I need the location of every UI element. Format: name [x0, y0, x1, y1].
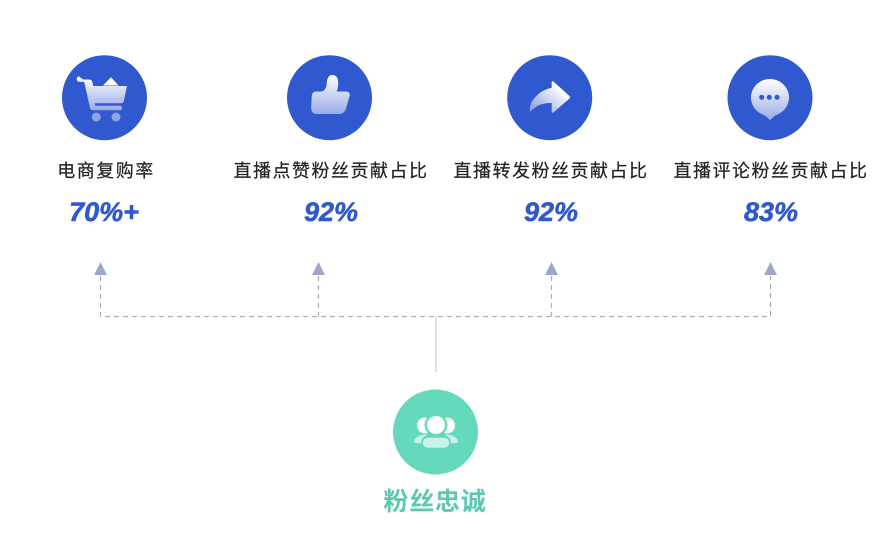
arrow: up 1	[94, 262, 107, 275]
value: 83%: 83%	[744, 197, 798, 227]
label: live like share: 直播点赞粉丝贡献占比	[234, 161, 428, 181]
icon: shopping cart	[62, 55, 147, 140]
value: 92% like: 92%	[304, 197, 358, 227]
label: live forward share: 直播转发粉丝贡献占比	[454, 161, 648, 181]
label: e-commerce repurchase rate: 电商复购率	[57, 161, 155, 181]
icon: share arrow	[507, 55, 592, 140]
icon: thumbs up	[287, 55, 372, 140]
icon: comment bubble	[728, 55, 812, 140]
arrow: up 3	[545, 262, 558, 275]
connector: vertical stem	[435, 316, 437, 372]
heading: fan loyalty: 粉丝忠诚	[383, 488, 487, 516]
connector: dashed bracket	[100, 276, 770, 316]
arrow: up 4	[764, 262, 777, 275]
value: 92% forward: 92%	[524, 197, 578, 227]
label: live comment share: 直播评论粉丝贡献占比	[674, 161, 868, 181]
icon: fan group	[393, 390, 478, 474]
arrow: up 2	[312, 262, 325, 275]
value: 70%+: 70%+	[69, 197, 139, 227]
